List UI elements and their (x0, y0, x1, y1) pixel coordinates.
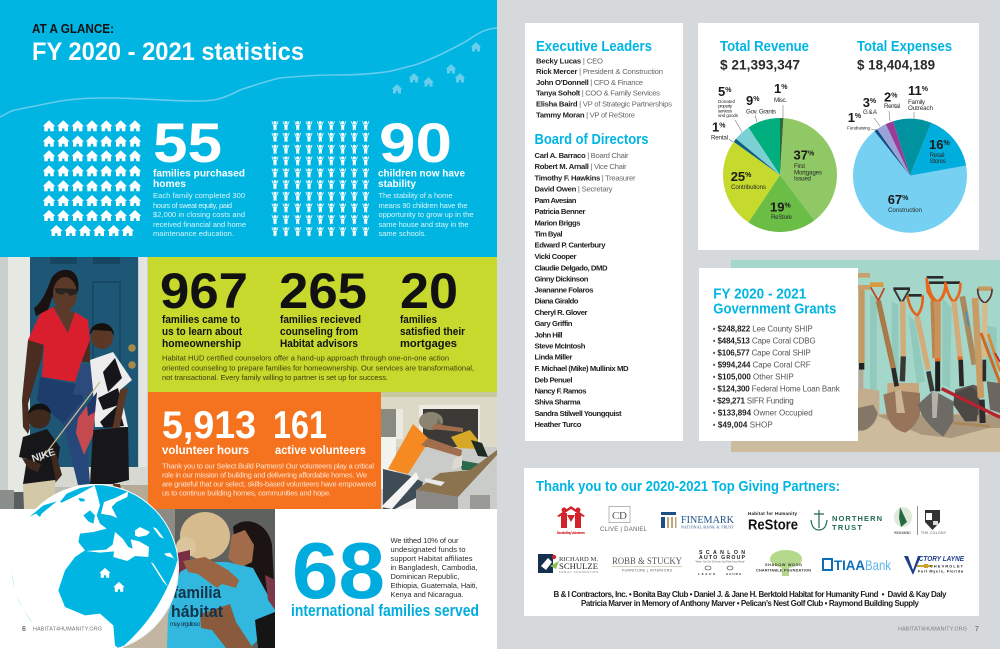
logo: Shadow Wood Charitable Foundation (756, 550, 811, 576)
stat: 20 families (400, 263, 466, 350)
logo: TIAA Bank: TIAA (834, 557, 865, 573)
left page background (0, 0, 497, 649)
grants list (713, 325, 841, 430)
stat: 90 children now have stability (378, 111, 474, 238)
executive leaders list: John O’Donnell | CFO & Finance (536, 78, 643, 87)
panel: revenue and expenses (698, 23, 979, 250)
pie chart: expenses: % (922, 86, 929, 93)
pie chart: revenue (711, 81, 837, 232)
pie chart: expenses: Fundraising (847, 126, 870, 130)
pie chart: revenue: % (808, 150, 815, 158)
pie chart: expenses: 3 (863, 95, 870, 110)
logo: Robb and Stucky: FURNITURE | INTERIORS (622, 568, 673, 572)
heading: total revenue: $ 21,393,347 (720, 56, 800, 72)
logo: Scanlon Auto Group: “When You Get To Know You’ll Not Know About” (695, 560, 745, 564)
stat: 967 families: us to learn about (162, 326, 242, 338)
pie chart: revenue: Rental (711, 134, 728, 142)
grants list: • $994,244 Cape Coral CRF (713, 360, 811, 369)
grants list: • $29,271 SIFR Funding (713, 397, 794, 406)
logo: Robb and Stucky (612, 557, 682, 572)
logo: Victory Layne Chevrolet (904, 556, 964, 575)
pie chart: revenue: Mortgages (794, 170, 822, 176)
pie chart: revenue: 5 (718, 84, 725, 99)
stat: 55 families purchased homes (153, 111, 246, 238)
heading: government grants: Government Grants (713, 300, 836, 318)
stat: 55 families purchased homes: families purchased (153, 168, 245, 180)
logo: Pelican Landing / The Colony: THE COLONY (921, 531, 947, 535)
pie chart: expenses: Rental (884, 103, 900, 110)
logo: Victory Layne Chevrolet: ICTORY LAYNE (917, 556, 964, 563)
logo: ReStore: Habitat for Humanity (748, 511, 798, 516)
logo: FineMark: NATIONAL BANK & TRUST (681, 526, 735, 530)
photo: two women hugging (123, 509, 275, 648)
panel: government grants (699, 268, 858, 441)
counseling description: not transactional. Every family willing to partner is set up for success. (162, 373, 388, 382)
icon: globe with houses (12, 484, 179, 648)
board of directors list: Nancy F. Ramos (534, 386, 586, 395)
pie chart: expenses: Outreach (908, 105, 934, 112)
executive leaders list (536, 56, 672, 120)
logo: Scanlon Auto Group: AUTO GROUP (699, 555, 746, 561)
stat: 90 children now have stability: stability (378, 178, 416, 190)
international description: Kenya and Nicaragua. (390, 590, 464, 599)
logo: TIAA Bank: Bank (865, 557, 892, 573)
stat: 90 children now have stability: opportunity to grow up in the (378, 210, 474, 219)
logo: Victory Layne Chevrolet: Fort Myers, Florida (918, 570, 964, 574)
pie chart: expenses: % (902, 195, 909, 202)
board of directors list: John Hill (534, 330, 562, 339)
stat: 55 families purchased homes: $2,000 in closing costs and (153, 210, 245, 219)
pie chart: expenses: Retail (930, 152, 944, 159)
shirt lettering: muy orgulloso (170, 622, 201, 628)
stat: 55 families purchased homes: Each family completed 300 (153, 191, 245, 200)
heading: total revenue (720, 38, 809, 72)
logo: Northern Trust: NORTHERN (832, 514, 882, 523)
grants list: • $484,513 Cape Coral CDBG (713, 337, 816, 346)
stat: 68 international families served: 68 (292, 526, 385, 615)
stat: 967 families: families came to (162, 314, 240, 326)
stat: 55 families purchased homes: homes (153, 178, 186, 190)
board of directors list (534, 151, 636, 429)
logo: FineMark (661, 512, 735, 530)
logo: Shadow Wood Charitable Foundation: SHADOW WOOD (765, 563, 802, 567)
board of directors list: Tim Byal (534, 230, 562, 239)
stat: 55 families purchased homes: 55 (153, 111, 222, 174)
pie chart: expenses: Stores (930, 158, 946, 165)
pie chart: revenue: Misc. (774, 97, 787, 104)
logo: Bonita Bay Volunteers: Bonita Bay Volunteers (557, 531, 585, 535)
pie chart: expenses: 1 (848, 110, 855, 125)
board of directors list: Patricia Benner (534, 207, 586, 216)
heading: total expenses: $ 18,404,189 (857, 56, 935, 72)
board of directors list: Heather Turco (534, 420, 582, 429)
logo: Northern Trust (811, 510, 882, 532)
stat: 90 children now have stability: means 90 children have the (378, 201, 468, 210)
footer right: site and page number: 7 (975, 626, 979, 633)
stat: 68 international families served (291, 526, 479, 620)
stat: 161 active volunteers (273, 404, 366, 457)
volunteer description: us to continue building homes, communities and hope. (162, 488, 331, 498)
pie chart: expenses: % (870, 98, 877, 105)
heading: total revenue: Total Revenue (720, 38, 809, 55)
heading: government grants (713, 286, 836, 318)
panel: international families (11, 475, 479, 649)
pie chart: revenue: % (784, 203, 791, 210)
grants list: • $106,577 Cape Coral SHIP (713, 349, 811, 358)
board of directors list: F. Michael (Mike) Mullinix MD (534, 364, 629, 373)
stat: 20 families: families (400, 314, 437, 326)
stat: 90 children now have stability: same schools. (378, 229, 426, 238)
stat: 90 children now have stability: same house and stay in the (378, 220, 468, 229)
logo: ReStore (748, 511, 798, 534)
photo: family at front door: NIKE (31, 447, 57, 465)
pie chart: revenue: 1 (774, 81, 781, 96)
grants list: • $105,000 Other SHIP (713, 373, 794, 382)
international description: Ethiopia, Guatemala, Haiti, (390, 581, 478, 590)
logo: Richard M. Schulze: SCHULZE (559, 561, 598, 571)
pie chart: revenue: % (781, 84, 788, 91)
pie chart: revenue: % (725, 87, 732, 94)
board of directors list: Claudie Delgado, DMD (534, 263, 608, 272)
pie chart: revenue: 19 (770, 200, 784, 215)
grants list: • $248,822 Lee County SHIP (713, 325, 813, 334)
logo: Richard M. Schulze (538, 554, 598, 574)
international description: undesignated funds to (390, 545, 466, 554)
board of directors list: Shiva Sharma (534, 398, 581, 407)
stat: 265 families: families recieved (280, 314, 361, 326)
board of directors list: Timothy F. Hawkins | Treasurer (534, 173, 636, 182)
logo: Scanlon Auto Group: LEXUS (698, 572, 715, 576)
logo: Scanlon Auto Group: SCANLON (699, 550, 745, 556)
shirt lettering (170, 583, 223, 628)
pie chart: expenses: % (855, 113, 862, 120)
stat: 265 families: 265 (279, 263, 367, 319)
pie chart: revenue: 37 (794, 148, 808, 162)
board of directors list: Gary Griffin (534, 319, 573, 328)
panel: at a glance statistics (0, 0, 497, 257)
executive leaders list: Becky Lucas | CEO (536, 56, 603, 66)
board of directors list: Diana Giraldo (534, 297, 579, 306)
pie chart: revenue: Gov. Grants (746, 108, 776, 116)
pie chart: revenue: % (753, 96, 760, 103)
pie chart: revenue: First (794, 163, 805, 170)
logo: Pelican Landing / The Colony (894, 506, 947, 535)
photo: volunteer at miter saw (381, 392, 497, 509)
pie chart: expenses: Family (908, 99, 926, 106)
stat: 967 families: homeownership (162, 338, 241, 350)
stat: 90 children now have stability: The stability of a home (378, 191, 452, 200)
heading: government grants: FY 2020 - 2021 (713, 286, 806, 302)
board of directors list: Marion Briggs (534, 218, 580, 227)
other partners list (554, 590, 947, 608)
icon grid: 55 houses (43, 120, 141, 236)
logo: Clive Daniel (600, 506, 648, 533)
pie chart: revenue: and goods (718, 113, 739, 118)
executive leaders list: Tanya Soholt | COO & Family Services (536, 89, 660, 98)
logo: TIAA Bank (823, 557, 892, 573)
footer right: site and page number: HABITAT4HUMANITY.ORG (898, 626, 967, 632)
stat: 55 families purchased homes: received financial and home (153, 220, 246, 229)
pie chart: expenses (847, 83, 967, 233)
stat: 265 families: Habitat advisors (280, 338, 358, 350)
board of directors list: Ginny Dickinson (534, 274, 589, 283)
counseling description: Habitat HUD certified counselors offer a hand-up approach through one-on-one action (162, 354, 449, 362)
heading: board of directors: Board of Directors (534, 131, 648, 148)
executive leaders list: Elisha Baird | VP of Strategic Partnerships (536, 100, 672, 108)
grants list: • $124,300 Federal Home Loan Bank (713, 385, 841, 394)
pie chart: revenue: 25 (731, 169, 745, 184)
other partners list: B & I Contractors, Inc. • Bonita Bay Club • Daniel J. & Jane H. Berktold Habitat for Humanity Fund • David & Kay Daly (554, 590, 947, 599)
pie chart: revenue: % (719, 123, 726, 130)
pie chart: expenses: % (943, 140, 950, 147)
executive leaders list: Tammy Moran | VP of ReStore (536, 110, 635, 120)
volunteer description (162, 462, 376, 498)
stat: 90 children now have stability: children now have (378, 168, 465, 180)
stat: 967 families (160, 263, 248, 350)
pie chart: revenue: 9 (746, 93, 753, 108)
panel: counseling statistics (148, 257, 497, 392)
pie chart: expenses: 67 (888, 192, 902, 207)
heading: top giving partners: Thank you to our 2020-2021 Top Giving Partners: (536, 478, 840, 495)
pie chart: expenses: 11 (908, 83, 922, 98)
stat: 161 active volunteers: active volunteers (275, 443, 366, 457)
skyline curve with small houses (0, 28, 497, 117)
stat: 20 families: mortgages (400, 338, 457, 350)
stat: 265 families (279, 263, 367, 350)
international description (390, 536, 478, 599)
board of directors list: Linda Miller (534, 353, 572, 362)
logo: Robb and Stucky: ROBB & STUCKY (612, 557, 682, 567)
stat: 161 active volunteers: 161 (273, 404, 327, 447)
stat: 5,913 volunteer hours: 5,913 (162, 404, 256, 447)
pie chart: expenses: G & A (863, 109, 878, 116)
pie chart: expenses: Construction (888, 207, 923, 214)
pie chart: revenue: Donated (718, 99, 735, 104)
stat: 967 families: 967 (160, 263, 248, 319)
stat: 55 families purchased homes: hours of sweat equity, paid (153, 201, 232, 210)
pie chart: revenue: Contributions (731, 184, 766, 191)
panel: leaders and board (525, 23, 683, 441)
board of directors list: Sandra Stilwell Youngquist (534, 409, 622, 418)
board of directors list: Pam Avesian (534, 196, 577, 205)
stat: 265 families: counseling from (280, 326, 358, 338)
volunteer description: are grateful that our select, skills-based volunteers have empowered (162, 480, 376, 488)
pie chart: revenue: services (718, 108, 733, 113)
other partners list: Patricia Marver in Memory of Anthony Marver • Pelican’s Nest Golf Club • Raymond Building Supply (581, 599, 920, 608)
stat: 55 families purchased homes: maintenance education. (153, 229, 234, 238)
logo: FineMark: FINEMARK (681, 515, 734, 526)
footer left: page number and site: 6 (22, 626, 26, 633)
footer left: page number and site: HABITAT4HUMANITY.ORG (33, 626, 102, 632)
board of directors list: Robert M. Arnall | Vice Chair (534, 162, 627, 171)
heading: executive leaders: Executive Leaders (536, 38, 652, 55)
board of directors list: David Owen | Secretary (534, 185, 613, 194)
volunteer description: Thank you to our Select Build Partners! Our volunteers play a critical (162, 462, 374, 470)
executive leaders list: Rick Mercer | President & Construction (536, 67, 663, 76)
international description: Dominican Republic, (390, 572, 460, 581)
pie chart: expenses: 16 (929, 137, 943, 152)
panel: volunteer statistics (148, 392, 381, 509)
logo: Richard M. Schulze: RICHARD M. (559, 556, 598, 563)
stat: 20 families: 20 (400, 263, 458, 319)
pie chart: expenses: % (891, 93, 898, 100)
pie chart: revenue: ReStore (771, 214, 793, 221)
photo: shovels against a wall (731, 260, 1000, 452)
icon grid: 90 children (272, 121, 369, 236)
board of directors list: Edward P. Canterbury (534, 241, 606, 250)
stat: 5,913 volunteer hours: volunteer hours (162, 443, 249, 457)
counseling description: oriented counseling to prepare families for homeownership. Our services are transformational, (162, 364, 474, 372)
pie chart: revenue: % (745, 172, 752, 179)
stat: 90 children now have stability: 90 (379, 111, 452, 174)
logo: Northern Trust: TRUST (832, 523, 862, 532)
heading: total expenses: Total Expenses (857, 38, 952, 55)
logo: Pelican Landing / The Colony: PELICAN LANDING (894, 531, 912, 535)
title: FY 2020 - 2021 statistics (32, 38, 304, 66)
logo: Victory Layne Chevrolet: CHEVROLET (930, 564, 964, 568)
heading: total expenses (857, 38, 952, 72)
logo: Scanlon Auto Group: ACURA (726, 572, 742, 576)
logo: Richard M. Schulze: FAMILY FOUNDATION (559, 570, 598, 574)
volunteer description: role in our mission of building and delivering affordable homes. We (162, 470, 367, 480)
pie chart: revenue: property (718, 104, 733, 109)
shirt lettering: familia (173, 583, 221, 602)
heading: at a glance: AT A GLANCE: (32, 22, 114, 36)
international description: support Habitat affiliates (390, 554, 473, 563)
panel: top giving partners (524, 468, 979, 616)
board of directors list: Cheryl R. Glover (534, 308, 588, 317)
international description: in Bangladesh, Cambodia, (390, 563, 478, 572)
board of directors list: Carl A. Barraco | Board Chair (534, 151, 629, 160)
board of directors list: Jeananne Folaros (534, 286, 594, 295)
logo: ReStore: ReStore (748, 516, 798, 534)
logo: Clive Daniel: CLIVE | DANIEL (600, 527, 648, 533)
grants list: • $49,004 SHOP (713, 421, 773, 430)
photo: family at front door (0, 257, 148, 510)
pie chart: revenue: 1 (712, 120, 719, 135)
logo: Bonita Bay Volunteers (557, 506, 585, 535)
shirt lettering: hábitat (171, 602, 223, 621)
stat: 68 international families served: international families served (291, 602, 479, 620)
logo: Clive Daniel: CD (612, 510, 627, 522)
logo: Scanlon Auto Group (695, 550, 746, 576)
counseling description (162, 354, 474, 382)
logo: Shadow Wood Charitable Foundation: CHARITABLE FOUNDATION (756, 568, 811, 572)
board of directors list: Deb Penuel (534, 375, 572, 384)
international description: We tithed 10% of our (390, 536, 459, 545)
pie chart: expenses: 2 (884, 90, 891, 105)
pie chart: revenue: Issued (794, 176, 812, 182)
board of directors list: Steve McIntosh (534, 342, 586, 351)
grants list: • $133,894 Owner Occupied (713, 409, 813, 418)
board of directors list: Vicki Cooper (534, 252, 576, 261)
stat: 20 families: satisfied their (400, 326, 466, 338)
